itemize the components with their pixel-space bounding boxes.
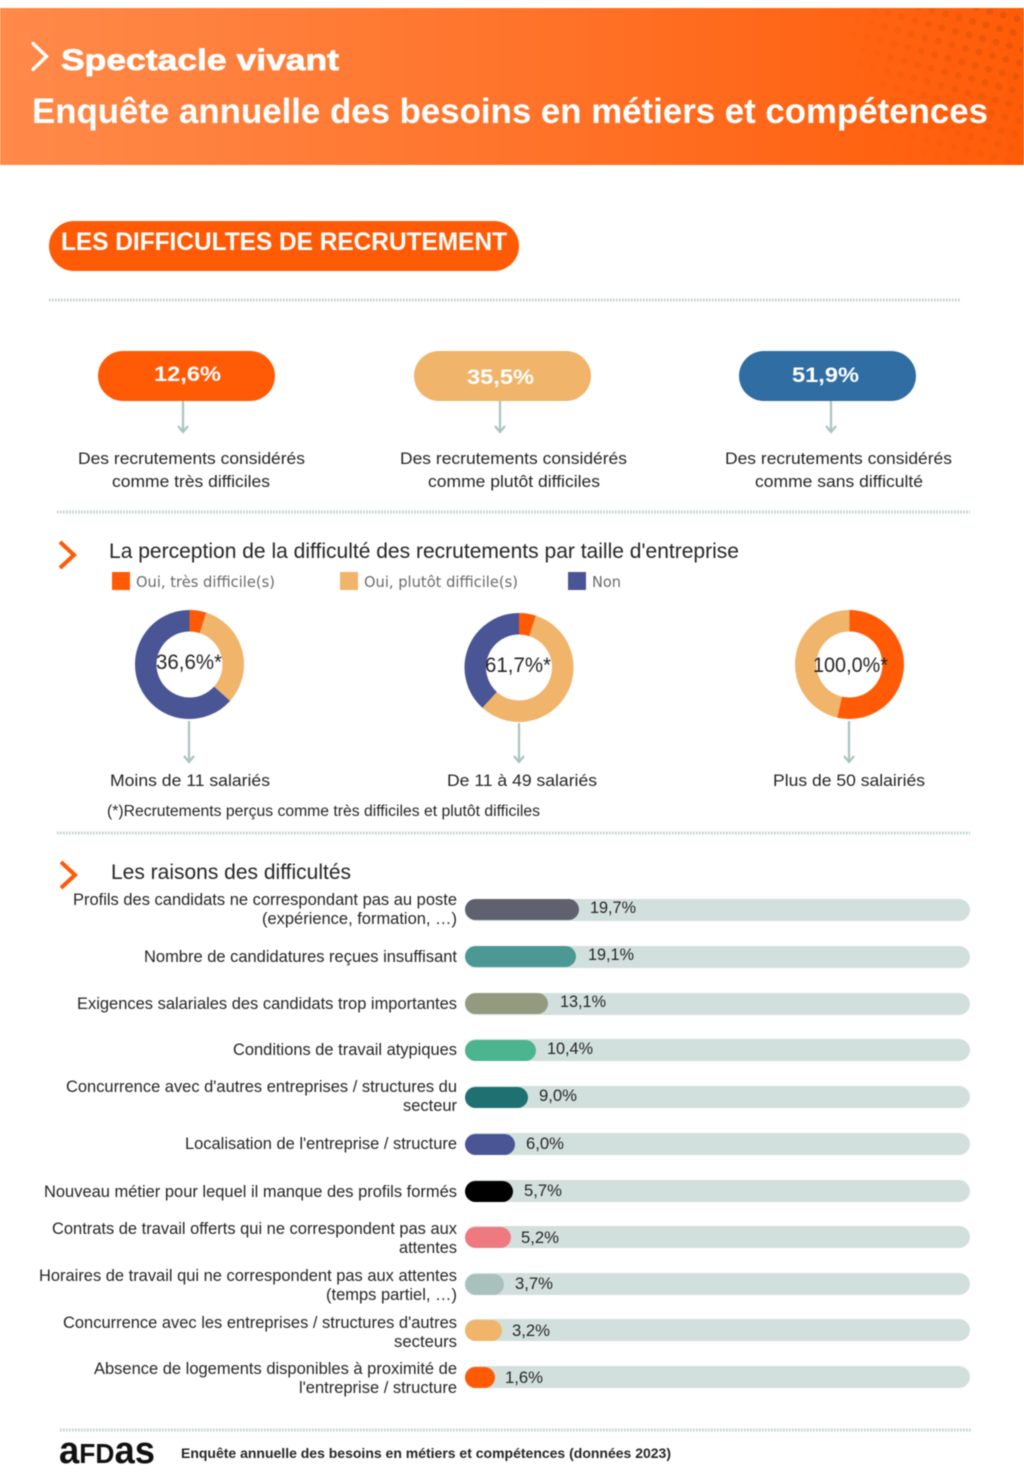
- legend: Oui, très difficile(s): [136, 573, 275, 591]
- reason 2: [144, 946, 970, 968]
- footer logo: aFDas: [59, 1430, 155, 1472]
- reason 1: [73, 891, 970, 928]
- reasons heading: Les raisons des difficultés: [111, 861, 351, 884]
- stat caption: [400, 450, 627, 491]
- section heading pill: LES DIFFICULTES DE RECRUTEMENT: [61, 228, 507, 256]
- reason 1: 19,7%: [590, 899, 636, 917]
- arrow: [826, 401, 836, 432]
- reason 3: 13,1%: [560, 993, 606, 1011]
- legend: Oui, plutôt difficile(s): [364, 573, 518, 591]
- reason 8: 5,2%: [521, 1229, 559, 1247]
- reason 9: 3,7%: [515, 1275, 553, 1293]
- reason 5: Concurrence avec d'autres entreprises / structures du: [66, 1078, 457, 1096]
- donut: over 50 employees: [773, 621, 925, 790]
- donut label: De 11 à 49 salariés: [447, 772, 597, 790]
- stat caption: comme très difficiles: [112, 473, 270, 491]
- title: Enquête annuelle des besoins en métiers et compétences: [32, 92, 988, 131]
- reason 11: l'entreprise / structure: [299, 1379, 457, 1397]
- reason 3: [77, 993, 970, 1015]
- arrow: [844, 721, 854, 762]
- stat caption: Des recrutements considérés: [78, 450, 305, 468]
- stat caption: [78, 450, 305, 491]
- stat: no difficulty: [725, 351, 952, 491]
- reason 9: (temps partiel, …): [326, 1286, 457, 1304]
- reason 5: [66, 1078, 970, 1115]
- stat: rather difficult: 35,5%: [467, 366, 534, 389]
- reason 10: Concurrence avec les entreprises / structures d'autres: [63, 1314, 457, 1332]
- reason 9: [39, 1267, 970, 1304]
- donut label: Moins de 11 salariés: [110, 772, 270, 790]
- stat: very difficult: [78, 351, 305, 491]
- stat caption: Des recrutements considérés: [400, 450, 627, 468]
- reason 6: Localisation de l'entreprise / structure: [185, 1135, 457, 1153]
- legend: Non: [592, 573, 621, 591]
- stat caption: comme sans difficulté: [755, 473, 923, 491]
- reason 6: [185, 1133, 970, 1155]
- arrow: [184, 721, 194, 762]
- reason 6: 6,0%: [526, 1135, 564, 1153]
- donut: 11 to 49 employees: 61,7%*: [485, 653, 552, 677]
- reason 10: [63, 1314, 970, 1351]
- reason 11: [94, 1360, 970, 1397]
- icon: reasons chevron: [61, 862, 75, 888]
- reason 1: (expérience, formation, …): [262, 910, 457, 928]
- section heading pill: [49, 221, 519, 271]
- reason 8: [52, 1220, 970, 1257]
- donut: 11 to 49 employees: [447, 624, 597, 790]
- reason 5: secteur: [403, 1097, 458, 1115]
- reason 1: Profils des candidats ne correspondant pas au poste: [73, 891, 457, 909]
- reason 10: secteurs: [394, 1333, 457, 1351]
- header subtitle: Spectacle vivant: [61, 44, 339, 77]
- donut: under 11 employees: 36,6%*: [156, 650, 223, 674]
- perception heading: La perception de la difficulté des recrutements par taille d'entreprise: [109, 540, 739, 563]
- donut: under 11 employees: [110, 621, 270, 790]
- arrow: [495, 401, 505, 432]
- stat: very difficult: 12,6%: [154, 363, 221, 386]
- reason 2: 19,1%: [588, 946, 634, 964]
- reason 2: Nombre de candidatures reçues insuffisant: [144, 948, 457, 966]
- arrow: [514, 723, 524, 762]
- footer source: Enquête annuelle des besoins en métiers et compétences (données 2023): [181, 1445, 671, 1461]
- reason 11: 1,6%: [505, 1369, 543, 1387]
- reason 11: Absence de logements disponibles à proximité de: [94, 1360, 457, 1378]
- bar chart: reasons: [39, 891, 970, 1397]
- arrow: [178, 401, 188, 432]
- reason 7: Nouveau métier pour lequel il manque des profils formés: [44, 1183, 457, 1201]
- header banner: [0, 8, 1024, 165]
- reason 3: Exigences salariales des candidats trop importantes: [77, 995, 457, 1013]
- legend: [112, 572, 621, 591]
- reason 7: [44, 1180, 970, 1202]
- stat caption: Des recrutements considérés: [725, 450, 952, 468]
- reason 8: attentes: [399, 1239, 457, 1257]
- stat: no difficulty: 51,9%: [792, 364, 859, 387]
- reason 9: Horaires de travail qui ne correspondent pas aux attentes: [39, 1267, 457, 1285]
- reason 4: Conditions de travail atypiques: [233, 1041, 457, 1059]
- icon: perception chevron: [60, 542, 74, 568]
- reason 5: 9,0%: [539, 1087, 577, 1105]
- donut: over 50 employees: 100,0%*: [813, 653, 889, 677]
- reason 10: 3,2%: [512, 1322, 550, 1340]
- icon: header chevron: [33, 44, 46, 70]
- stat caption: [725, 450, 952, 491]
- reason 8: Contrats de travail offerts qui ne correspondent pas aux: [52, 1220, 458, 1238]
- reason 4: [233, 1039, 970, 1061]
- reason 7: 5,7%: [524, 1182, 562, 1200]
- stat caption: comme plutôt difficiles: [428, 473, 600, 491]
- stat: rather difficult: [400, 351, 627, 491]
- reason 4: 10,4%: [547, 1040, 593, 1058]
- donut label: Plus de 50 salairiés: [773, 772, 925, 790]
- footnote: (*)Recrutements perçus comme très difficiles et plutôt difficiles: [107, 803, 540, 820]
